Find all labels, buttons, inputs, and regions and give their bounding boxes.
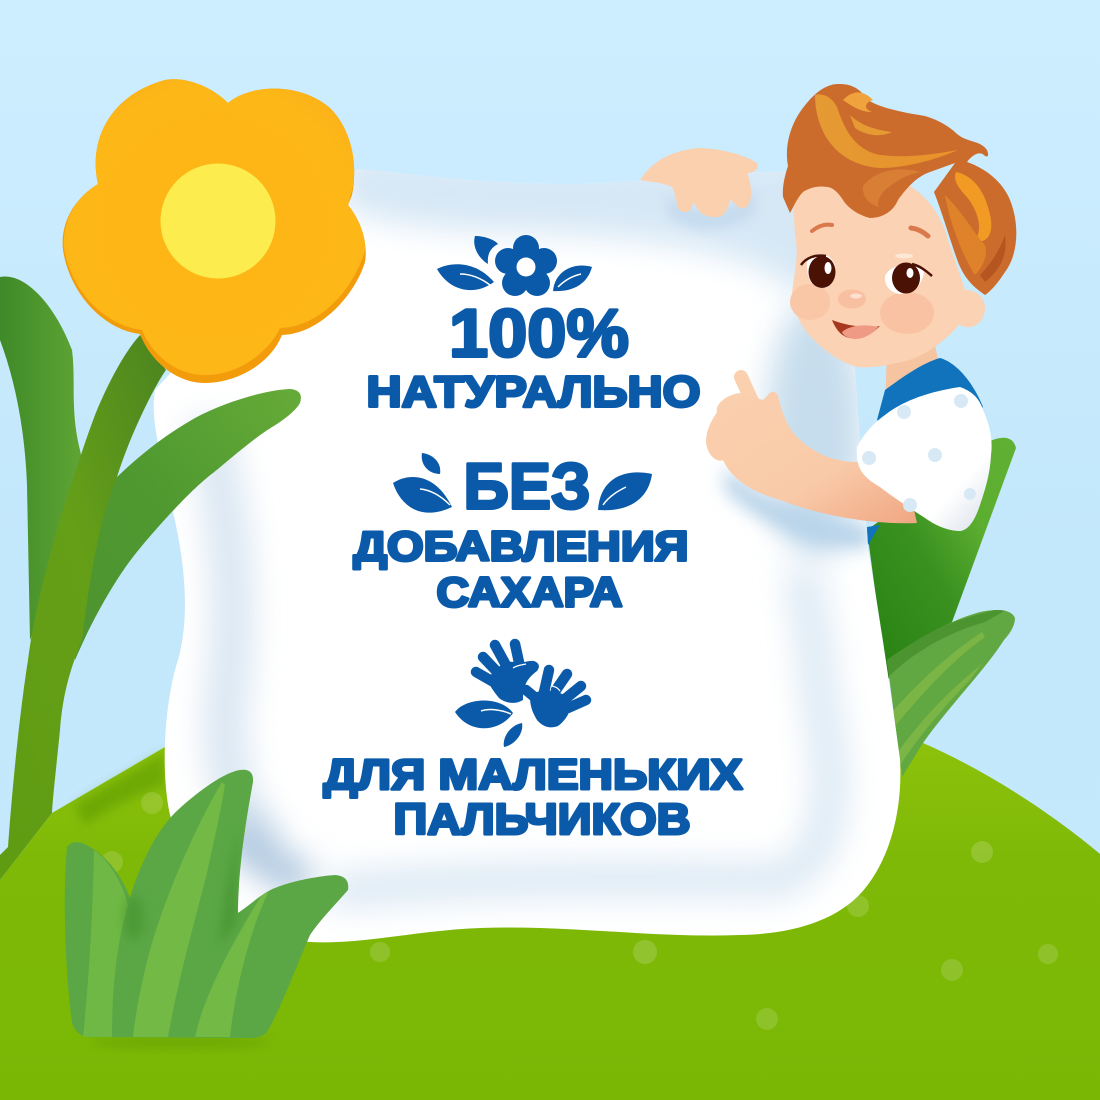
text: добавления: ДОБАВЛЕНИЯ xyxy=(354,522,688,570)
left eye xyxy=(801,254,836,288)
mouth xyxy=(832,320,880,339)
second hand xyxy=(526,670,586,727)
face xyxy=(792,172,970,367)
white banner panel xyxy=(154,150,900,942)
neck xyxy=(885,345,945,410)
top hand xyxy=(640,148,758,217)
flower centre xyxy=(160,164,276,278)
flower head xyxy=(63,79,366,383)
front grass tuft xyxy=(65,770,348,1048)
petals shadow rim xyxy=(63,79,366,383)
first hand xyxy=(476,644,539,703)
heading: без: БЕЗ xyxy=(464,450,590,522)
heading: 100%: 100% xyxy=(449,296,629,372)
sleeve xyxy=(857,387,992,531)
text: натурально: НАТУРАЛЬНО xyxy=(366,368,700,416)
petals xyxy=(64,79,365,375)
left leaf xyxy=(0,276,90,640)
flower right leaf xyxy=(70,389,301,660)
leaf xyxy=(455,700,513,728)
hair xyxy=(783,84,1016,295)
right back leaf xyxy=(867,438,1016,680)
right eye xyxy=(885,254,932,294)
text: для маленьких: ДЛЯ МАЛЕНЬКИХ xyxy=(324,751,743,799)
boy character xyxy=(640,84,1016,545)
stem xyxy=(0,335,166,880)
text: сахара: САХАРА xyxy=(436,568,622,616)
eyebrows xyxy=(812,225,832,231)
ear xyxy=(958,290,985,327)
icon: left leaves xyxy=(393,453,452,513)
nose xyxy=(838,290,866,308)
cheeks xyxy=(790,284,830,320)
plant: flower stem and leaves xyxy=(0,276,301,880)
icon: flower with leaves xyxy=(437,235,592,296)
hill xyxy=(0,690,1100,1100)
right front leaf xyxy=(885,605,1015,777)
text: пальчиков: ПАЛЬЧИКОВ xyxy=(394,795,690,844)
icon: right leaf xyxy=(598,472,652,510)
icon: baby hands with leaves xyxy=(455,644,586,747)
vest xyxy=(877,358,983,450)
arm and pointing hand xyxy=(706,377,917,523)
